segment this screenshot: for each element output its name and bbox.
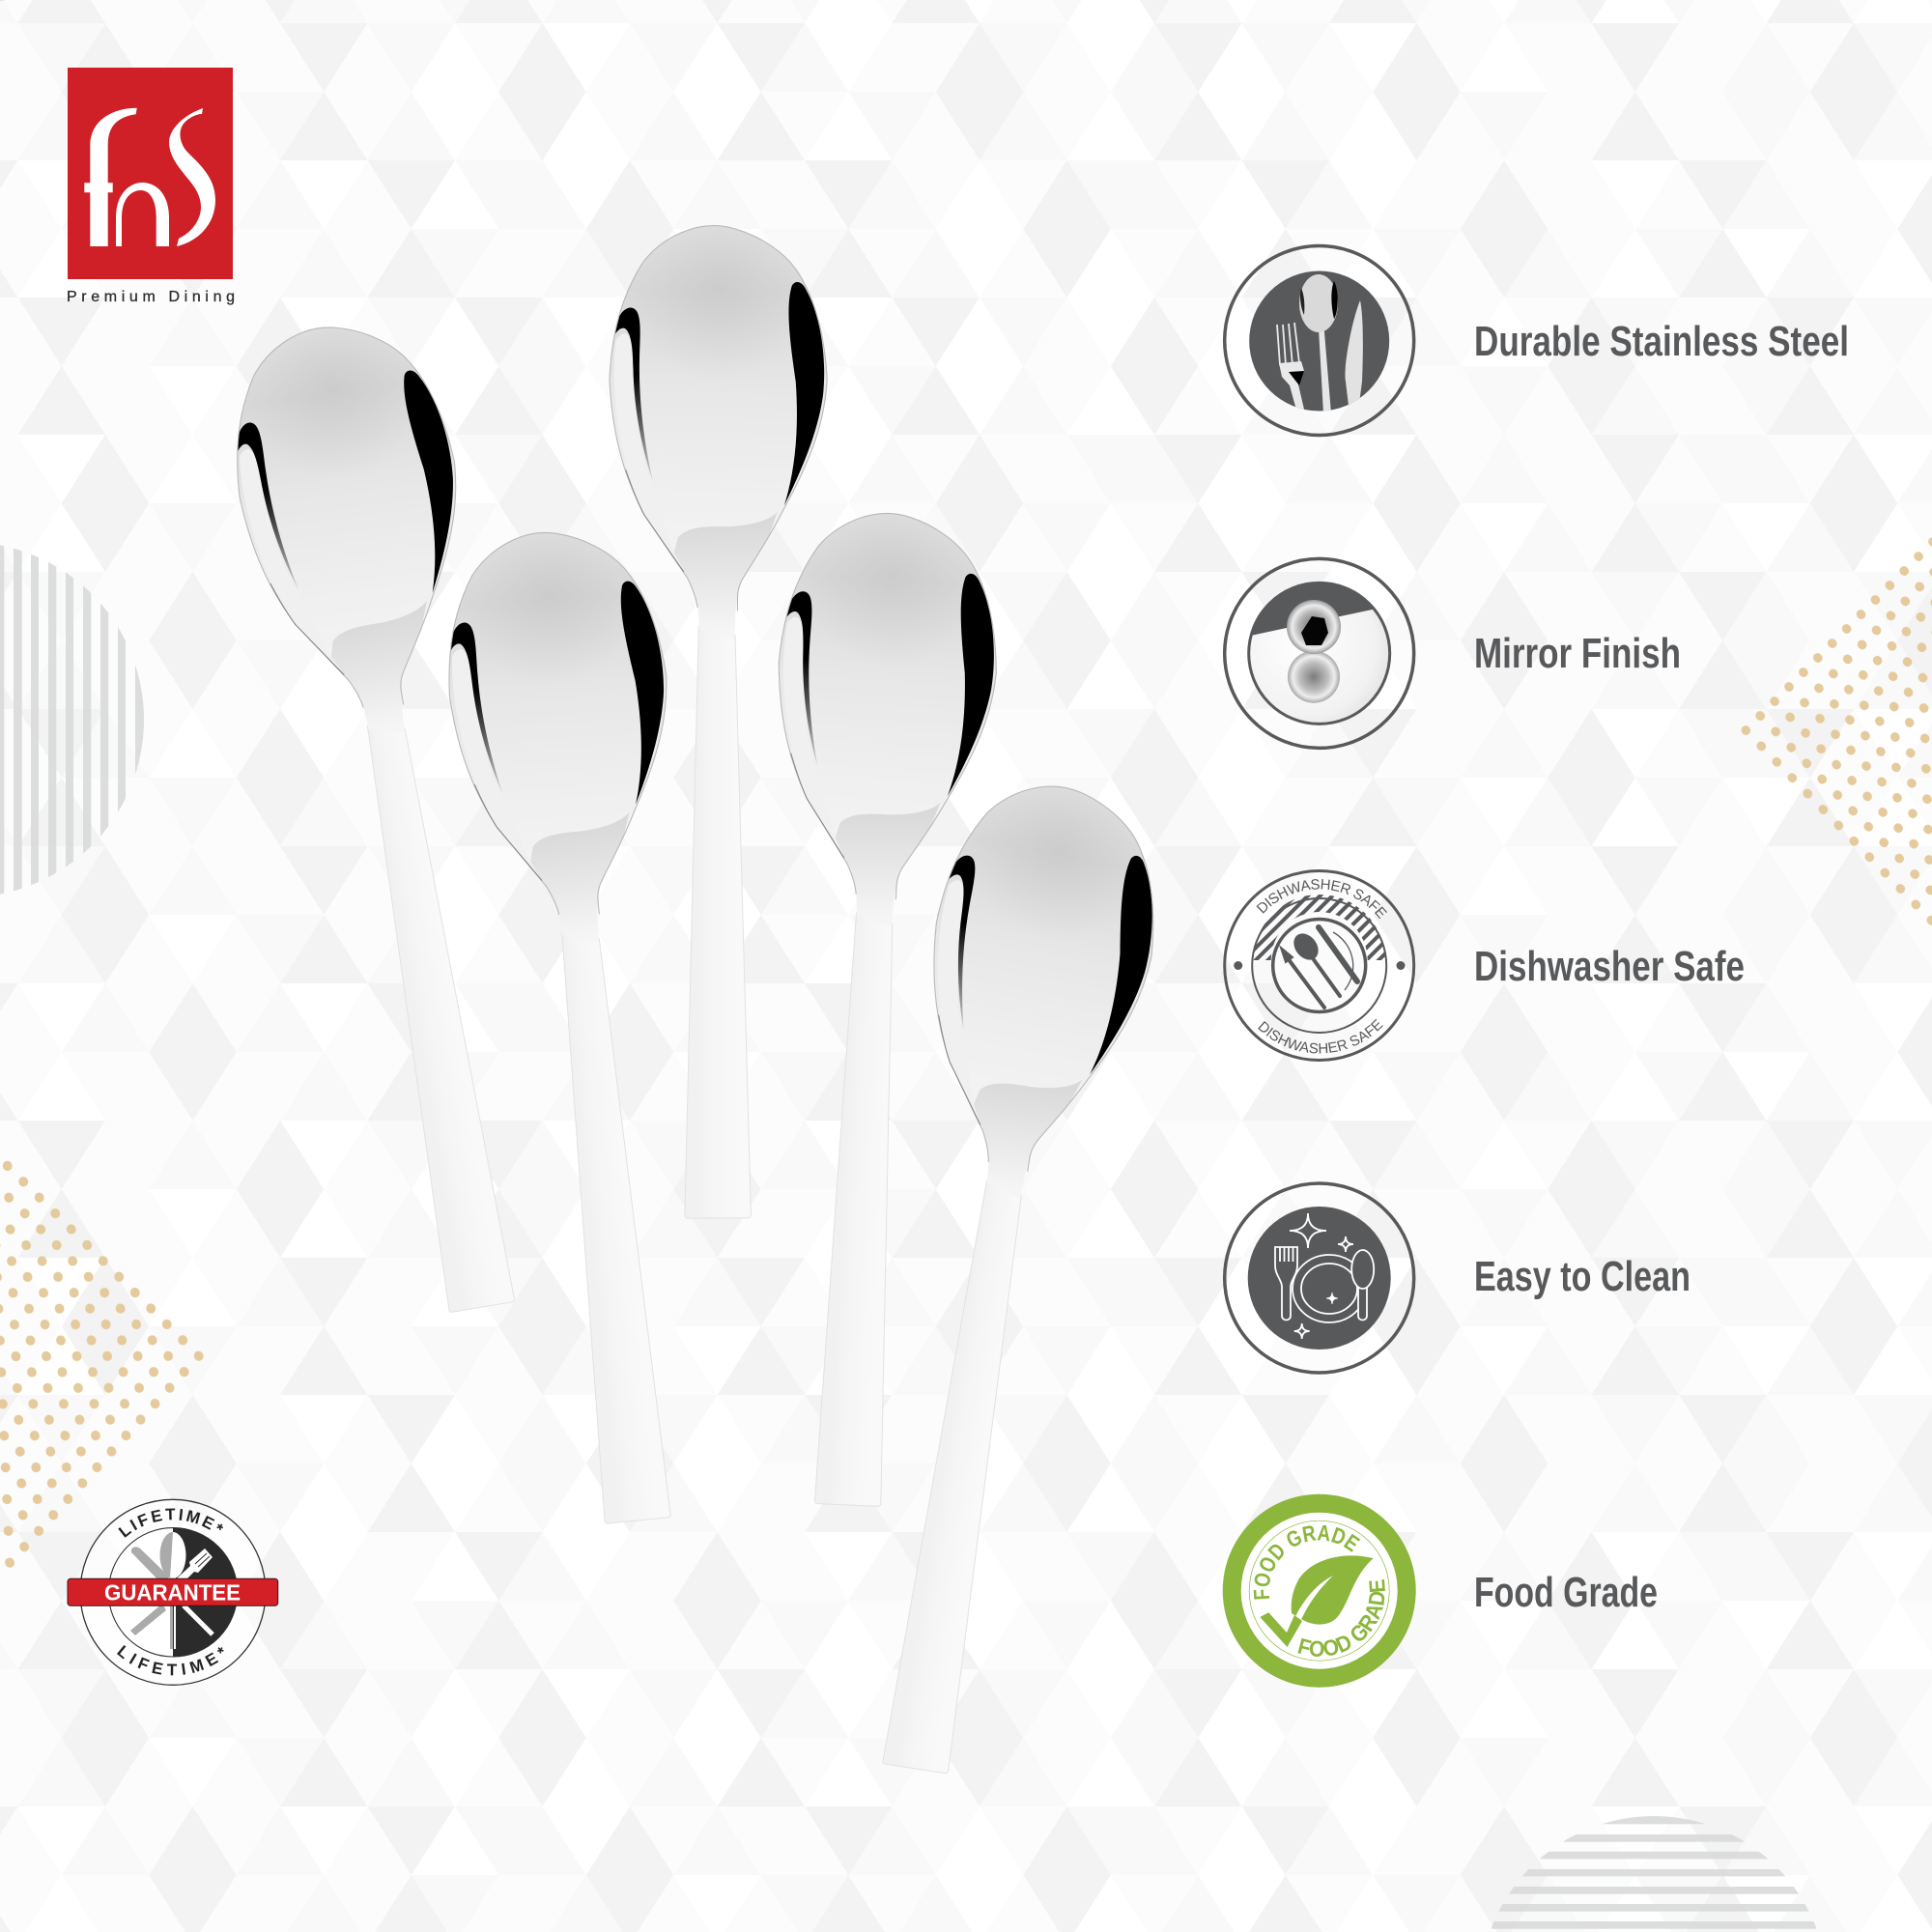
decorative dot diamond, left bbox=[0, 1148, 209, 1583]
lifetime guarantee badge: LIFETIME* bbox=[117, 1645, 224, 1675]
lifetime guarantee badge: GUARANTEE bbox=[104, 1580, 241, 1605]
feature 1 label: Durable Stainless Steel bbox=[1474, 318, 1849, 365]
feature 3 icon: dishwasher safe stamp: DISHWASHER SAFE bbox=[1258, 1018, 1383, 1053]
feature 3 label: Dishwasher Safe bbox=[1474, 943, 1745, 990]
spoon 6 (far right) bbox=[603, 741, 1332, 1788]
feature 3 icon: dishwasher safe stamp bbox=[1223, 869, 1416, 1062]
logo: FnS red block bbox=[67, 68, 235, 305]
feature 5 icon: food grade seal: FOOD GRADE bbox=[1298, 1579, 1385, 1657]
spoon 5 (centre right) bbox=[524, 475, 1169, 1521]
logo: FnS red block: Premium Dining bbox=[67, 289, 235, 305]
spoon 3 (centre left) bbox=[304, 505, 825, 1533]
decorative striped half circle, left bbox=[0, 531, 144, 918]
feature 2 icon: mirror ball bbox=[1225, 558, 1414, 748]
spoon 1 (far left) bbox=[0, 0, 31, 9]
feature 5 icon: food grade seal: FOOD GRADE bbox=[1254, 1524, 1360, 1600]
feature 4 label: Easy to Clean bbox=[1474, 1253, 1690, 1300]
lifetime guarantee badge bbox=[68, 1499, 278, 1686]
decorative dot diamond, right bbox=[1735, 533, 1932, 932]
feature 1 icon: cutlery disc bbox=[1225, 245, 1414, 435]
feature 2 label: Mirror Finish bbox=[1474, 630, 1681, 677]
feature 4 icon: clean plate disc bbox=[1225, 1183, 1414, 1373]
lifetime guarantee badge: LIFETIME* bbox=[118, 1509, 223, 1538]
decorative striped half circle, bottom bbox=[1492, 1816, 1816, 1929]
feature 5 icon: food grade seal bbox=[1223, 1493, 1416, 1688]
feature 3 icon: dishwasher safe stamp: DISHWASHER SAFE bbox=[1256, 879, 1387, 920]
feature 5 label: Food Grade bbox=[1474, 1569, 1658, 1616]
spoon 2 (upper left) bbox=[146, 306, 605, 1318]
spoon 4 (top centre) bbox=[390, 190, 995, 1234]
